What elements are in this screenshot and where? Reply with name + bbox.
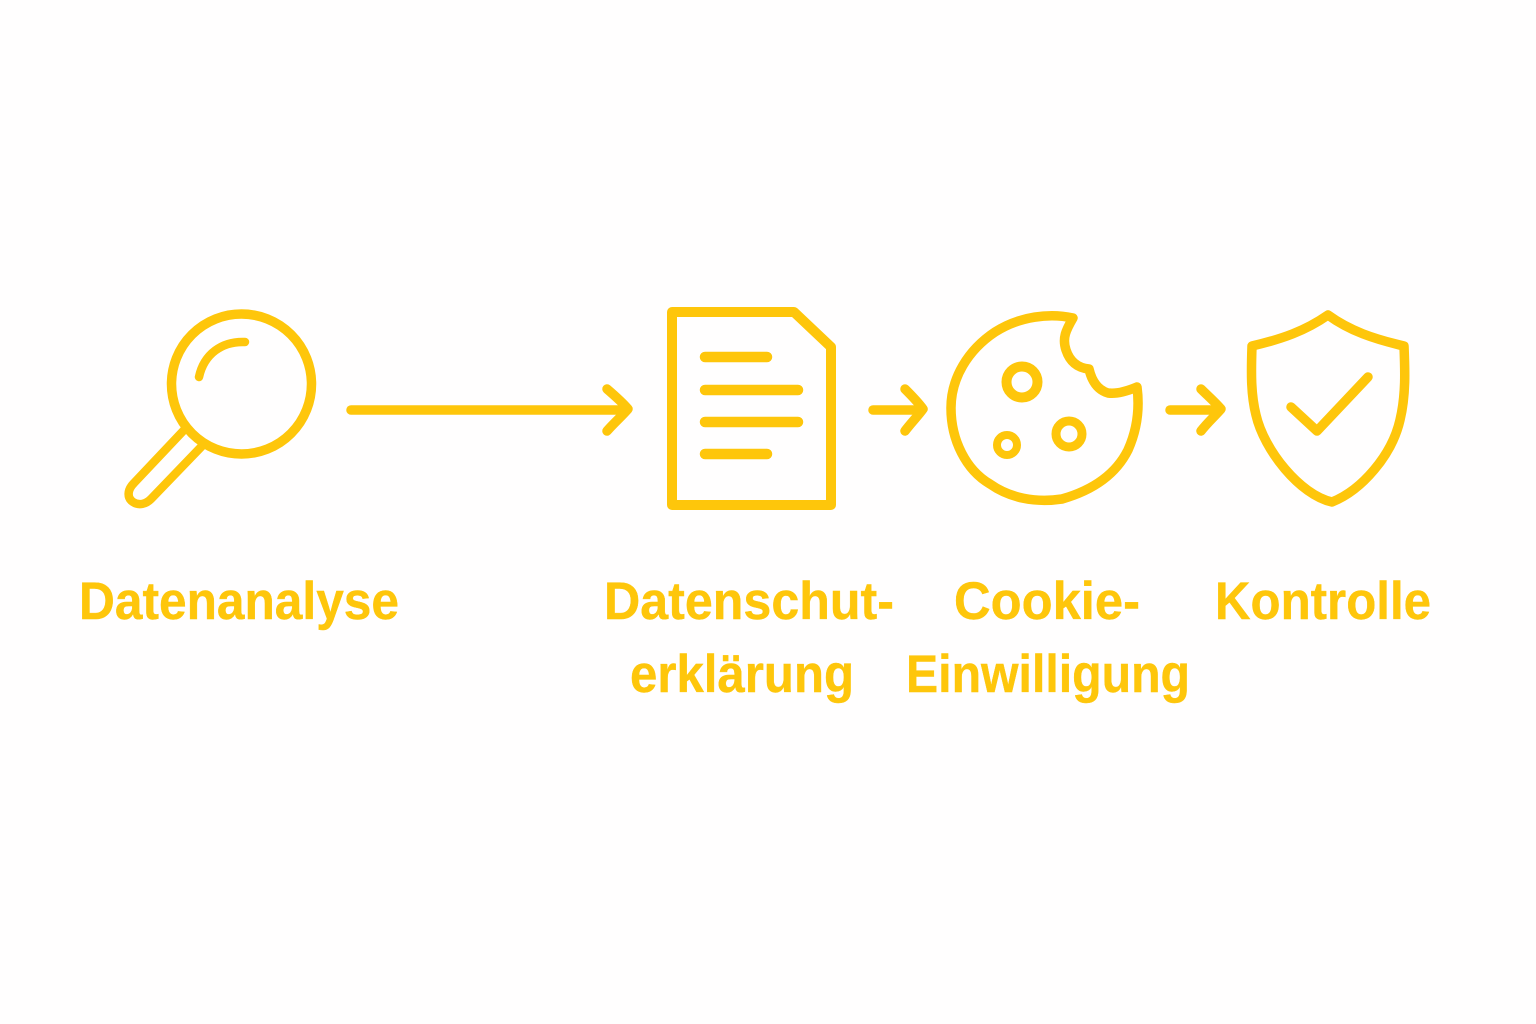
icon: shield with check xyxy=(1251,315,1405,502)
arrow: cookie consent to control xyxy=(1170,389,1221,431)
label: Datenschutzerklärung: Datenschut- xyxy=(604,572,894,631)
label: Cookie-Einwilligung: Cookie- xyxy=(954,572,1140,631)
label: Datenanalyse: Datenanalyse xyxy=(79,572,399,631)
label: Datenschutzerklärung xyxy=(604,572,894,704)
icon: cookie xyxy=(951,316,1138,500)
arrow: privacy statement to cookie consent xyxy=(873,389,923,431)
arrow: analysis to privacy statement xyxy=(351,389,628,431)
label: Datenschutzerklärung: erklärung xyxy=(630,645,854,704)
label: Cookie-Einwilligung: Einwilligung xyxy=(906,645,1190,704)
icon: document xyxy=(672,312,831,505)
icon: magnifying glass xyxy=(129,314,312,504)
label: Cookie-Einwilligung xyxy=(906,572,1190,704)
label: Kontrolle: Kontrolle xyxy=(1215,572,1431,631)
